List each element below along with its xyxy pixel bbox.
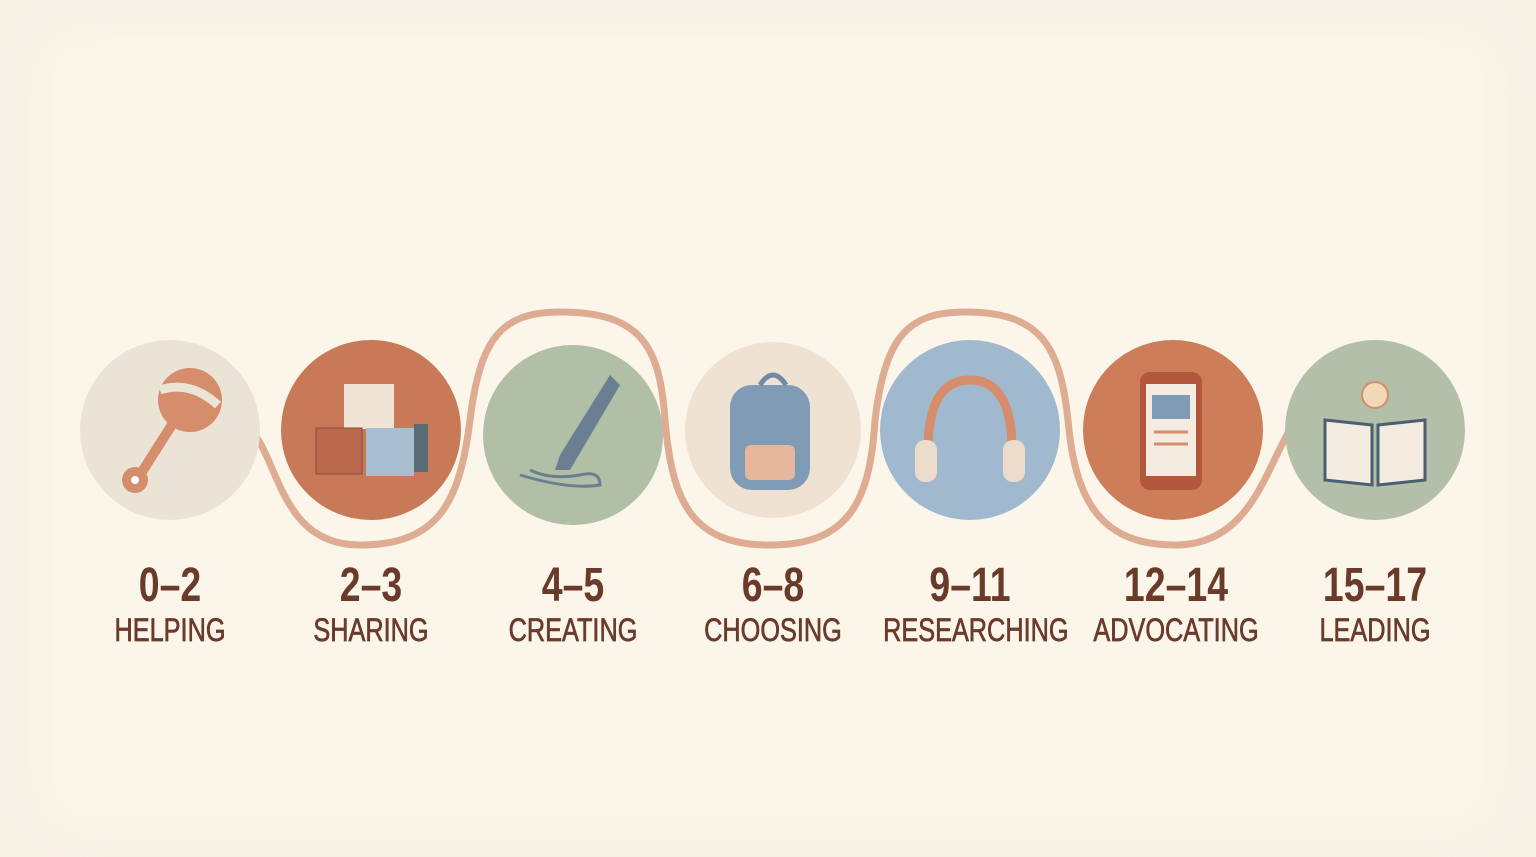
circle 5: [880, 340, 1060, 520]
label 0-2: HELPING: [115, 612, 225, 648]
label 6-8: CHOOSING: [704, 612, 842, 648]
wavy path: [255, 312, 1290, 545]
label 2-3: [313, 559, 429, 648]
label 4-5: [509, 559, 637, 648]
icon: blocks: [316, 384, 428, 476]
label 0-2: [115, 559, 225, 648]
label 12-14: [1093, 559, 1259, 648]
circle 1: [80, 340, 260, 520]
label 2-3: SHARING: [313, 612, 429, 648]
label 6-8: 6–8: [742, 559, 804, 612]
label 6-8: [704, 559, 842, 648]
label 12-14: ADVOCATING: [1093, 612, 1259, 648]
circle 2: [281, 340, 461, 520]
icon: phone: [1140, 372, 1202, 490]
label 9-11: 9–11: [929, 559, 1011, 612]
label 2-3: 2–3: [340, 559, 402, 612]
icon: book with bulb: [1325, 382, 1425, 485]
label 4-5: 4–5: [542, 559, 604, 612]
label 9-11: [883, 559, 1069, 648]
label 9-11: RESEARCHING: [883, 612, 1069, 648]
icon: backpack: [730, 375, 810, 490]
label 4-5: CREATING: [509, 612, 637, 648]
icon: crayon: [520, 375, 620, 486]
icon: rattle: [122, 368, 222, 493]
label 12-14: 12–14: [1124, 559, 1228, 612]
label 15-17: LEADING: [1320, 612, 1430, 648]
circle 6: [1083, 340, 1263, 520]
label 15-17: [1320, 559, 1430, 648]
circle 3: [483, 345, 663, 525]
circle 4: [685, 342, 861, 518]
label 15-17: 15–17: [1323, 559, 1427, 612]
circle 7: [1285, 340, 1465, 520]
icon: headphones: [915, 380, 1025, 482]
label 0-2: 0–2: [139, 559, 201, 612]
